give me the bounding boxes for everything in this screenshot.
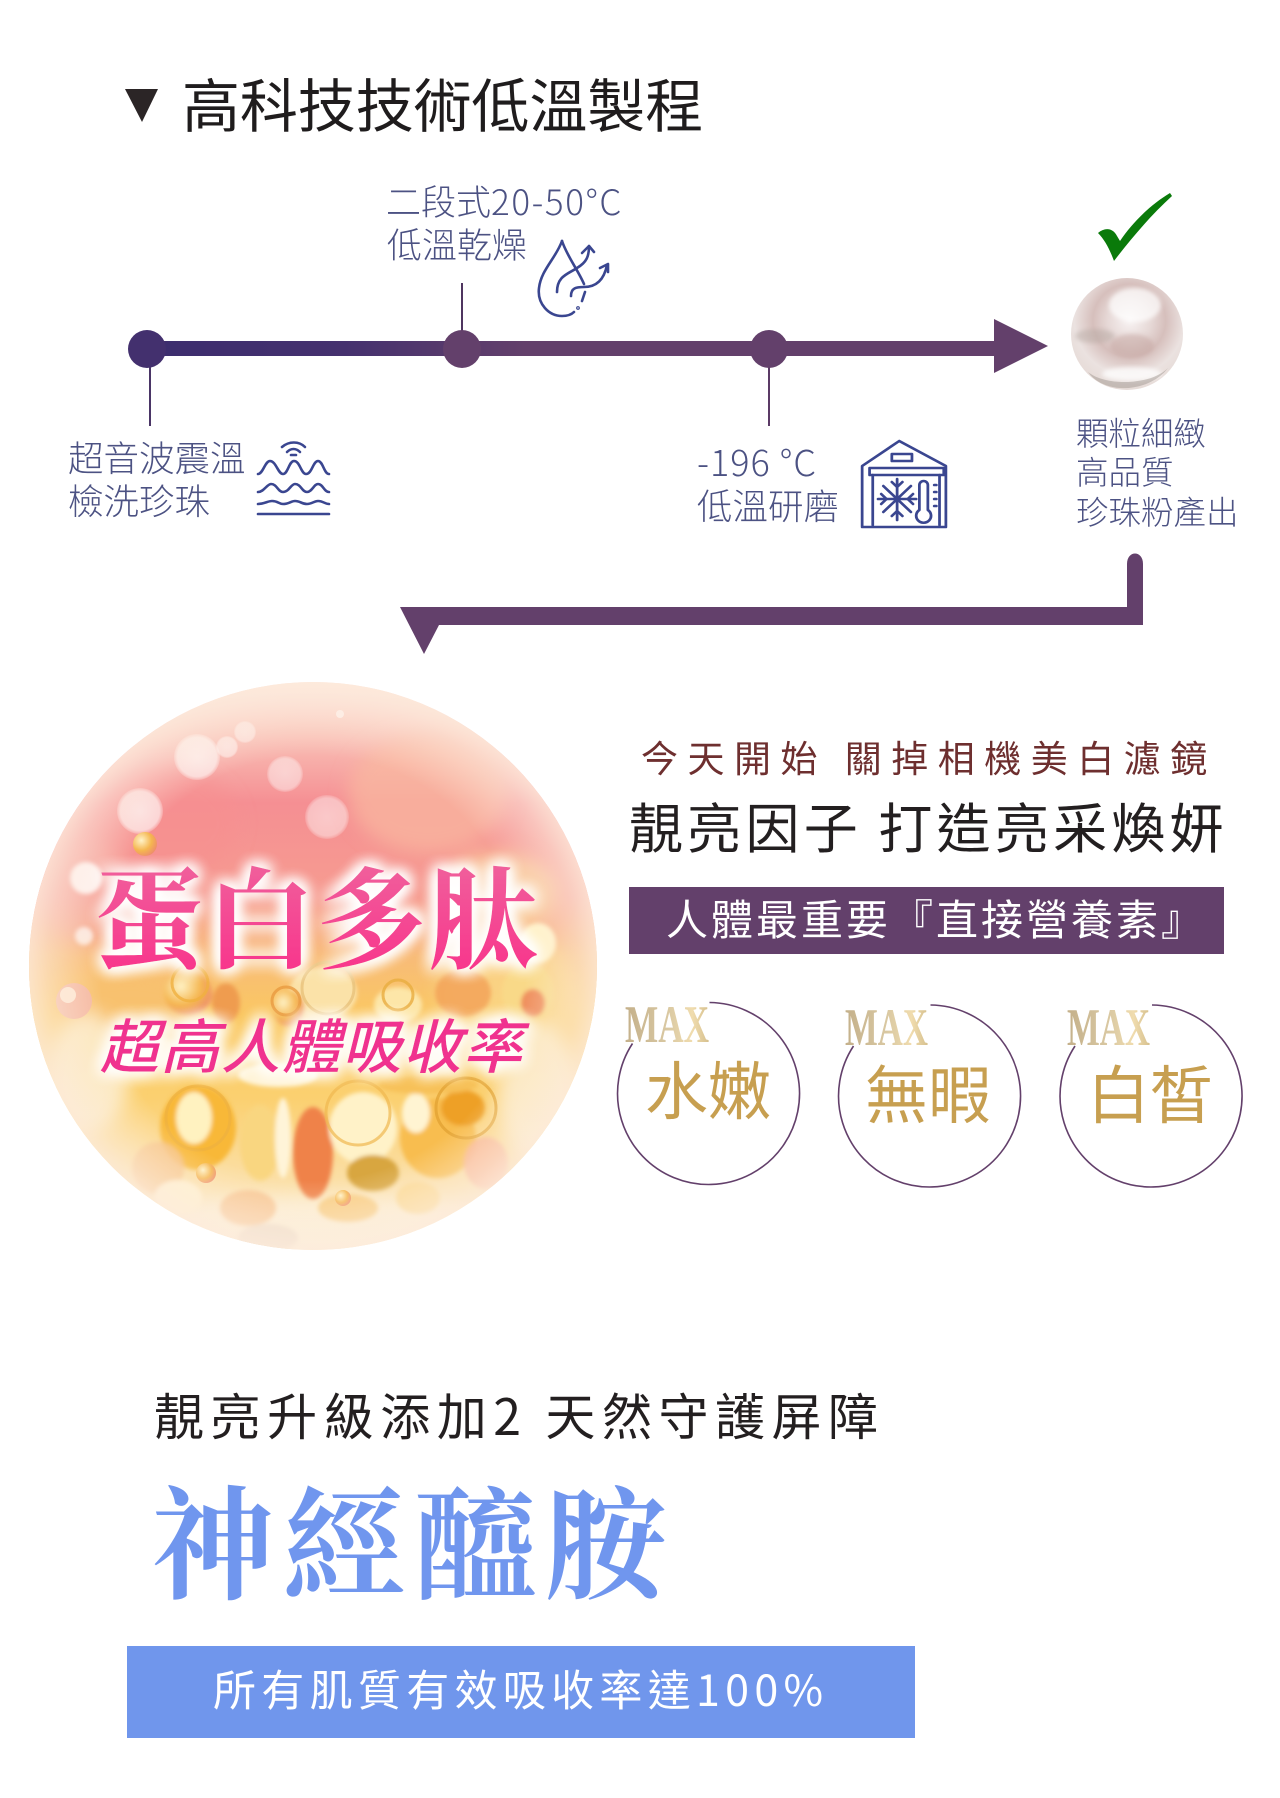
badge: max flawless: 無暇 <box>865 1046 991 1137</box>
badge: max flawless <box>839 999 1021 1187</box>
step: -196 °C cryogenic grinding <box>697 435 946 530</box>
banner: absorption rate: 所有肌質有效吸收率達100% <box>213 1657 828 1719</box>
badge: max hydrated <box>618 996 800 1184</box>
badge: max fair <box>1060 999 1242 1187</box>
step: fine pearl powder result: 珍珠粉產出 <box>1076 487 1239 534</box>
step: two-stage low temperature drying: 二段式20-50°C <box>386 175 623 226</box>
banner: direct nutrients: 人體最重要『直接營養素』 <box>666 887 1206 948</box>
process timeline arrow <box>128 283 1048 426</box>
step: ultrasonic cleaning: 檢洗珍珠 <box>68 474 210 525</box>
icon: sound waves over water <box>258 442 329 514</box>
step: ultrasonic cleaning: 超音波震溫 <box>68 431 246 482</box>
tagline: 今天開始 關掉相機美白濾鏡 <box>641 729 1217 783</box>
step: fine pearl powder result: 顆粒細緻 <box>1076 408 1206 455</box>
panel: peptide orb <box>18 673 608 1263</box>
orb title: 蛋白多肽 <box>94 862 540 984</box>
soft patches <box>48 761 576 1228</box>
step: fine pearl powder result: 高品質 <box>1076 447 1174 494</box>
step: ultrasonic cleaning <box>68 431 329 525</box>
banner: absorption rate <box>127 1646 915 1738</box>
badge: max flawless: MAX <box>845 999 928 1057</box>
step: -196 °C cryogenic grinding: -196 °C <box>697 435 817 487</box>
golden droplets <box>108 923 556 1252</box>
pearl <box>1071 278 1183 390</box>
step: two-stage low temperature drying: 低溫乾燥 <box>387 218 527 269</box>
step: fine pearl powder result <box>1076 408 1239 534</box>
return arrow <box>400 554 1143 654</box>
step: -196 °C cryogenic grinding: 低溫研磨 <box>697 479 839 530</box>
icon: water drop with rising arrows <box>539 241 608 316</box>
heading: brightening factor: 靚亮因子 打造亮采煥妍 <box>629 785 1228 864</box>
bokeh highlights <box>174 734 220 780</box>
icon: cold storage house <box>862 441 946 527</box>
green check mark <box>1098 193 1172 261</box>
badge: max hydrated: 水嫩 <box>645 1042 771 1133</box>
badge: max fair: 白皙 <box>1087 1046 1213 1137</box>
small pearly drops <box>133 832 157 856</box>
orb subtitle: 超高人體吸收率 <box>100 1000 530 1085</box>
step: two-stage low temperature drying <box>386 175 623 316</box>
badge: max hydrated: MAX <box>625 996 709 1054</box>
badge: max fair: MAX <box>1067 999 1150 1057</box>
ceramide title: 神經醯胺 <box>152 1481 676 1616</box>
heading: upgraded barrier: 靚亮升級添加2 天然守護屏障 <box>154 1378 885 1450</box>
heading: low temperature process: 高科技技術低溫製程 <box>182 60 703 144</box>
